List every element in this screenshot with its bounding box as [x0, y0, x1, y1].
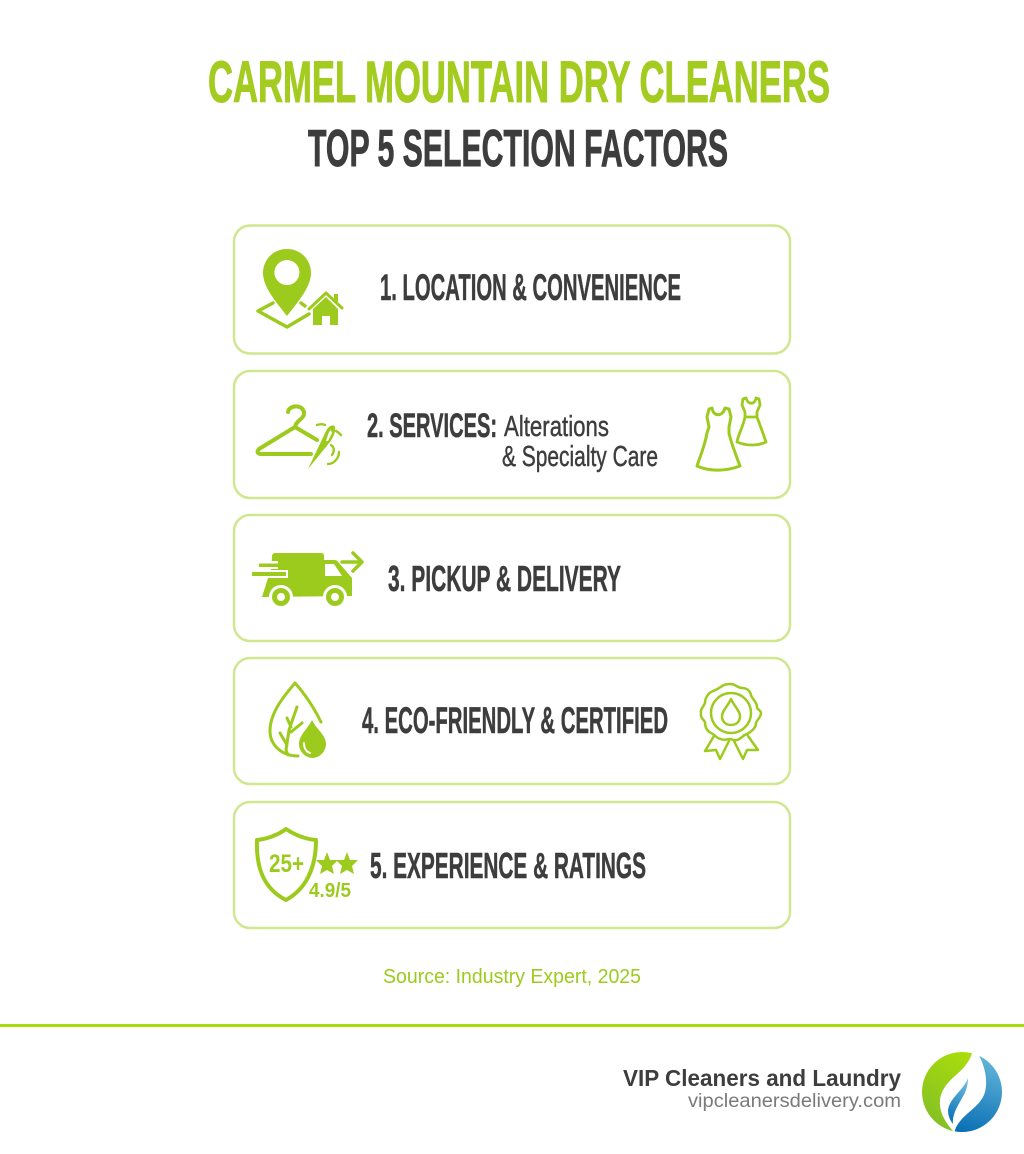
- logo: [922, 1052, 1002, 1132]
- icon: leaf and water drop: [270, 683, 326, 758]
- footer brand: vipcleanersdelivery.com: [688, 1091, 901, 1112]
- icon: shield with rating: 25+: [269, 850, 304, 878]
- label: factor 2: [367, 407, 658, 473]
- subtitle: TOP 5 SELECTION FACTORS: [308, 120, 728, 178]
- icon: shield with rating: [257, 829, 358, 902]
- panel: location and convenience: [234, 226, 790, 354]
- icon: award rosette: [701, 684, 761, 759]
- panel: pickup and delivery: [234, 515, 790, 641]
- label: factor 1: 1. LOCATION & CONVENIENCE: [380, 267, 681, 308]
- icon: shield with rating: 4.9/5: [309, 880, 351, 902]
- panel: services: [234, 371, 790, 498]
- label: factor 4: 4. ECO-FRIENDLY & CERTIFIED: [362, 700, 668, 741]
- footer divider: [0, 1024, 1024, 1027]
- panel: experience and ratings: [234, 802, 790, 928]
- label: factor 2: & Specialty Care: [502, 441, 658, 473]
- icon: delivery truck: [250, 553, 362, 609]
- label: factor 2: Alterations: [504, 411, 609, 443]
- panel: eco-friendly and certified: [234, 658, 790, 784]
- icon: map pin and house: [258, 249, 342, 327]
- label: factor 5: 5. EXPERIENCE & RATINGS: [370, 845, 646, 886]
- icon: hanger and needle: [258, 406, 341, 469]
- footer brand: [623, 1050, 1010, 1135]
- label: factor 2: 2. SERVICES:: [367, 407, 497, 445]
- label: factor 3: 3. PICKUP & DELIVERY: [388, 558, 621, 599]
- source note: Source: Industry Expert, 2025: [383, 966, 641, 988]
- icon: dresses: [697, 398, 766, 470]
- footer brand: VIP Cleaners and Laundry: [623, 1065, 901, 1091]
